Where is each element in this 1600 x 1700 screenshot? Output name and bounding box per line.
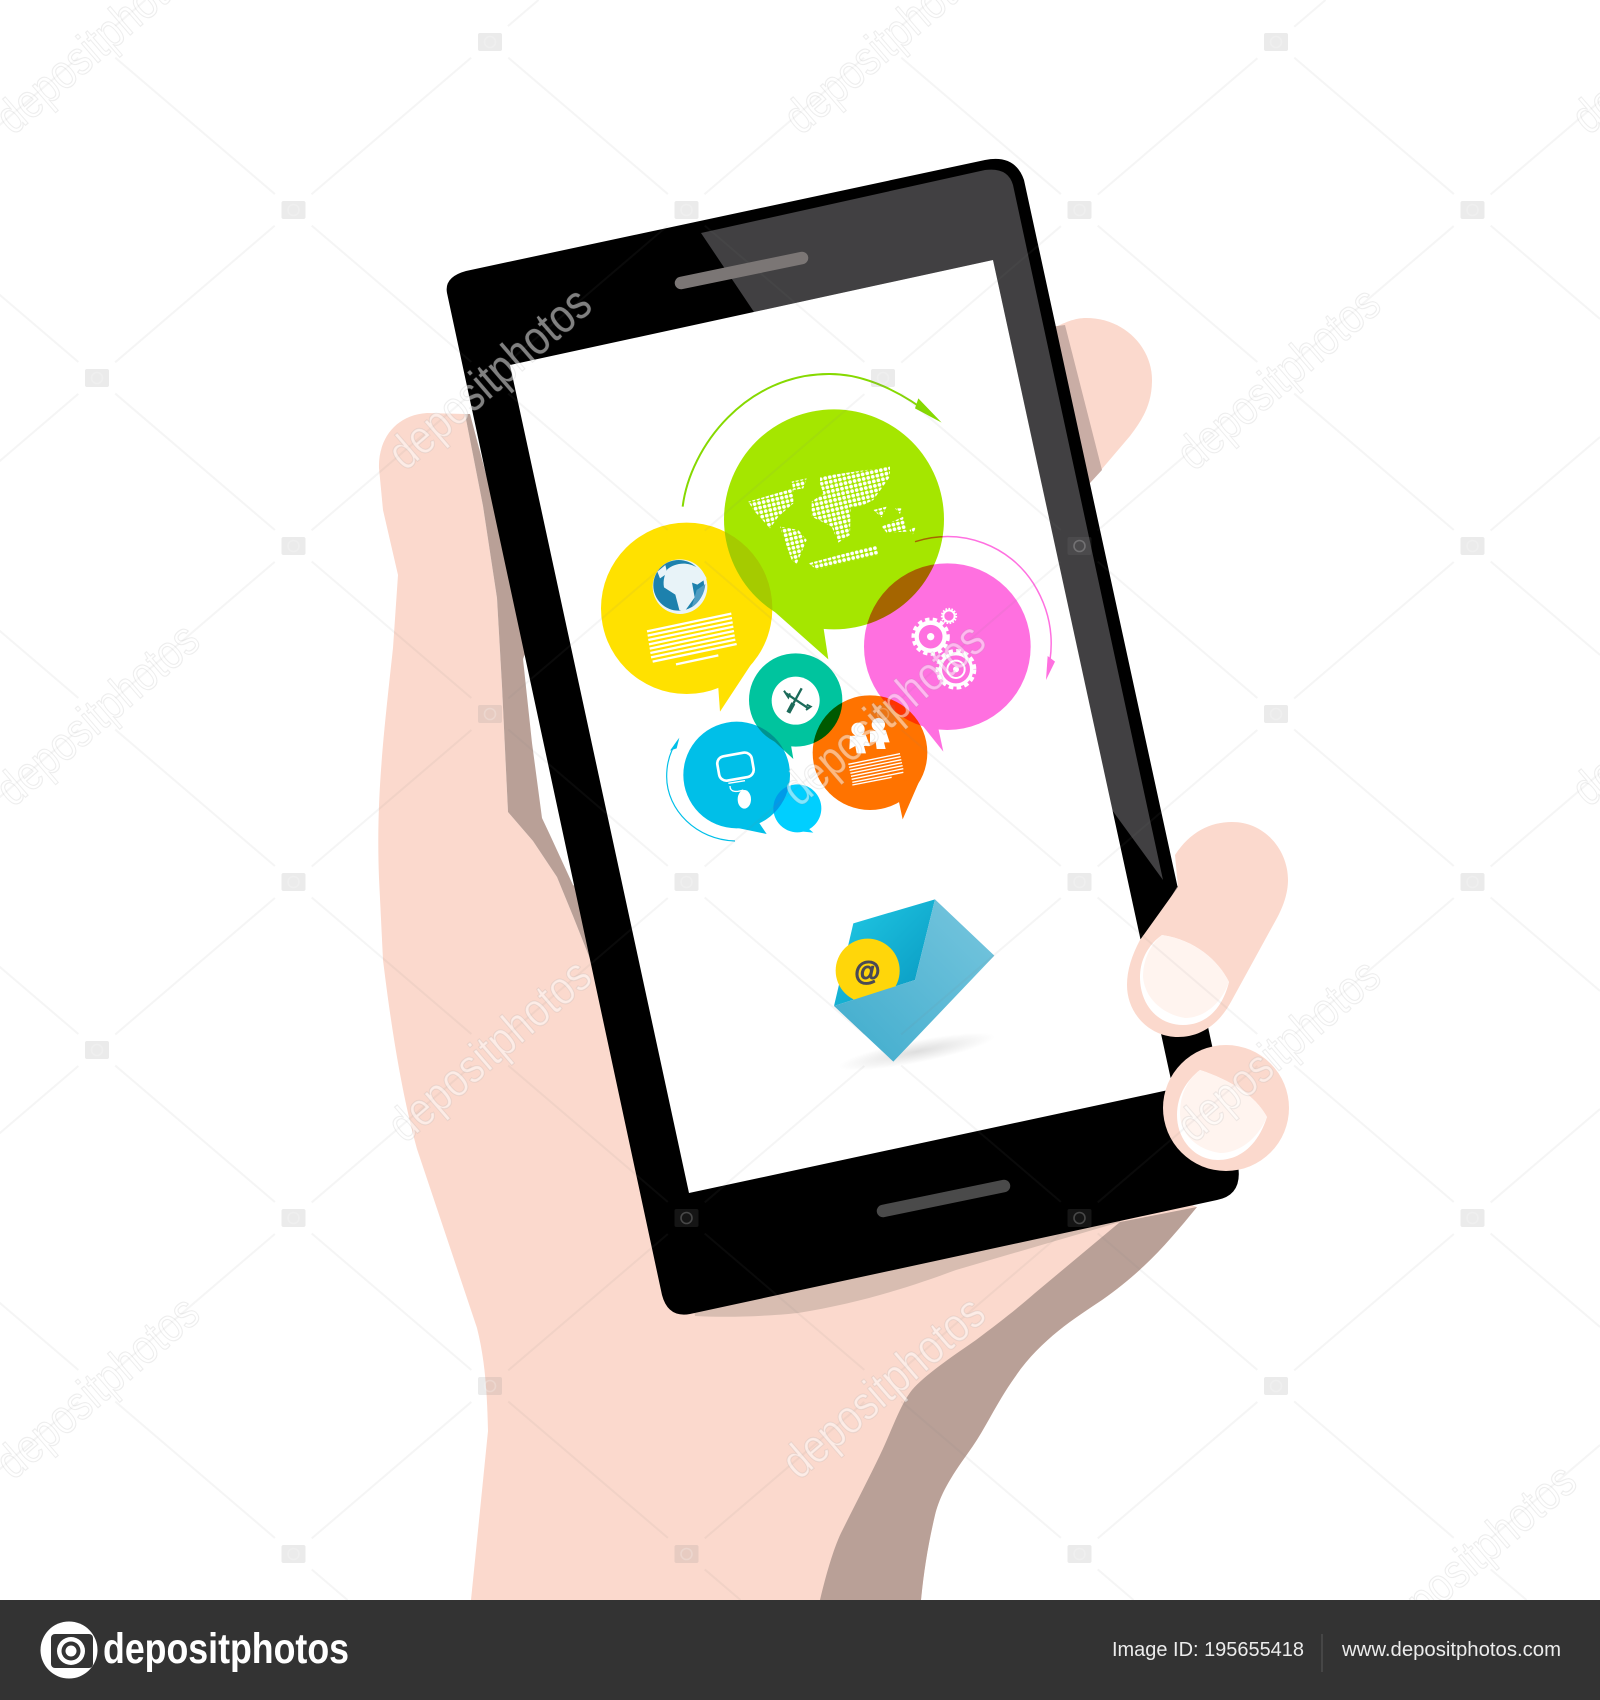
icon: gears	[913, 609, 975, 688]
icon: two people	[849, 718, 890, 753]
icon: dotted world map	[748, 467, 916, 569]
yellow bubble text lines	[647, 614, 737, 664]
pink speech bubble	[864, 563, 1031, 752]
teal speech bubble	[749, 653, 842, 759]
watermark text: depositphotos	[378, 277, 602, 480]
screen	[510, 260, 1173, 1193]
watermark camera icons	[85, 33, 1484, 1563]
top finger shadow	[1050, 325, 1102, 490]
icon: tools	[772, 677, 820, 725]
fingers over the phone	[1127, 822, 1289, 1171]
website: www.depositphotos.com	[1341, 1639, 1561, 1661]
top speaker	[681, 258, 802, 283]
phone body	[447, 159, 1239, 1315]
envelope front	[834, 899, 994, 1062]
arrow: blue arc	[667, 738, 735, 841]
palm side shadow	[465, 414, 600, 979]
icon: depositphotos logo mark	[40, 1622, 98, 1678]
ring fingernail	[1177, 1070, 1267, 1160]
watermark text: depositphotos	[378, 949, 602, 1152]
orange speech bubble	[813, 695, 927, 819]
footer divider	[1321, 1634, 1323, 1672]
wrist shadow	[820, 1207, 1197, 1600]
phone cast shadow	[690, 1190, 1130, 1317]
arrow: green arc	[683, 374, 942, 507]
bubble cluster	[601, 374, 1055, 841]
footer bar	[0, 1600, 1600, 1700]
arrow: pink arc	[915, 537, 1055, 680]
yellow speech bubble	[601, 523, 772, 712]
hand	[378, 318, 1197, 1600]
ring finger	[1163, 1045, 1289, 1171]
envelope shadow	[836, 1025, 997, 1078]
yellow @ disc	[836, 939, 900, 1003]
watermark text: depositphotos	[772, 613, 996, 816]
bottom speaker	[883, 1186, 1004, 1211]
image id: Image ID: 195655418	[1112, 1639, 1304, 1661]
index fingernail	[1140, 935, 1229, 1025]
logo wordmark: depositphotos	[103, 1625, 349, 1673]
watermark text: depositphotos	[772, 1286, 996, 1489]
watermark text: depositphotos	[1167, 949, 1391, 1152]
envelope back	[834, 899, 935, 1006]
index finger	[1127, 822, 1288, 1037]
finger shadow sliver	[1168, 873, 1190, 902]
watermark text: depositphotos	[1167, 277, 1391, 480]
glass glare	[701, 170, 1163, 880]
envelope icon	[834, 899, 997, 1078]
orange bubble text lines	[848, 754, 903, 785]
icon: computer and mouse	[716, 751, 755, 809]
top finger behind phone	[1050, 318, 1152, 490]
yellow @ disc: @	[854, 956, 880, 986]
blue speech bubble	[683, 722, 790, 834]
green speech bubble	[724, 409, 944, 659]
icon: globe	[653, 559, 707, 614]
smartphone	[447, 159, 1239, 1315]
small blue speech bubble	[773, 784, 821, 833]
palm and wrist	[378, 413, 1197, 1600]
